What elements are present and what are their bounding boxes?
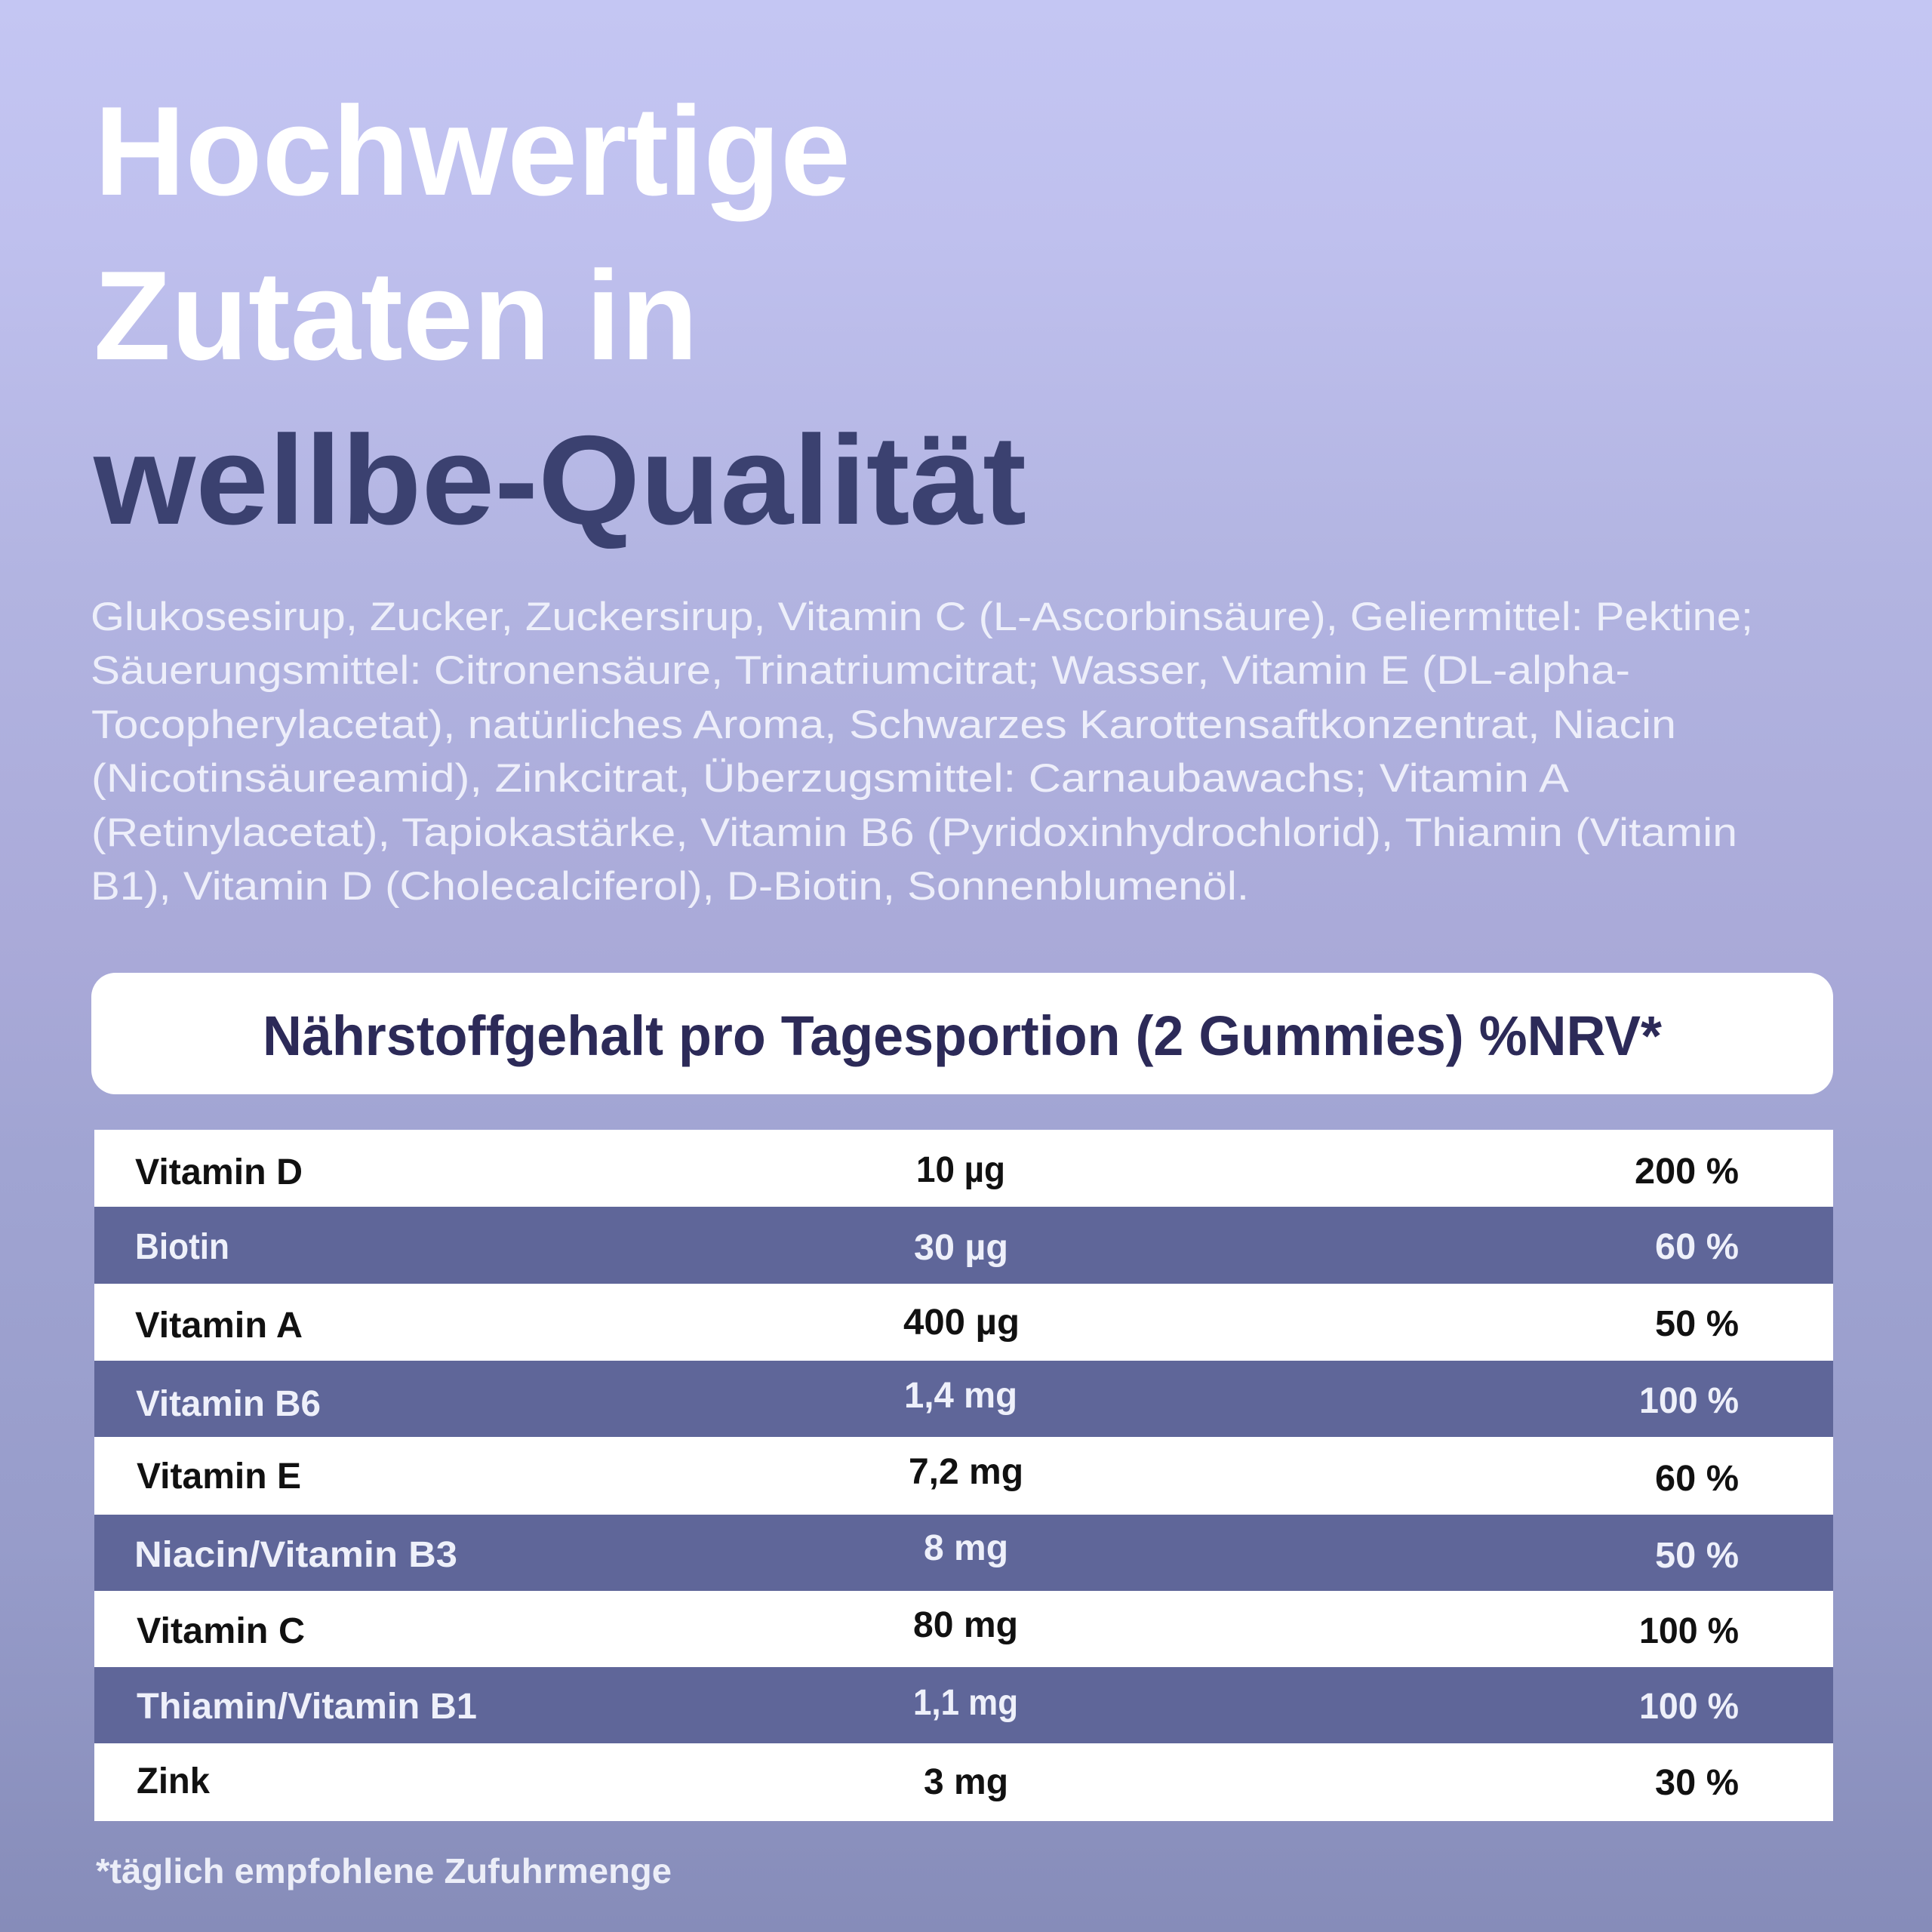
row: Niacin / Vitamin B3: 8 mg (924, 1528, 1008, 1568)
row: Zink: Zink (137, 1761, 210, 1801)
row: Vitamin D: 10 µg (916, 1150, 1005, 1190)
row: Vitamin D: Vitamin D (135, 1152, 303, 1192)
ingredients text block: Säuerungsmittel: Citronensäure, Trinatriumcitrat; Wasser, Vitamin E (DL-alpha- (91, 648, 1630, 693)
row: Vitamin D: 200 % (1635, 1152, 1739, 1192)
row: Vitamin C (94, 1591, 1833, 1667)
row: Vitamin C: 80 mg (913, 1605, 1018, 1645)
row: Vitamin A: 400 µg (903, 1303, 1020, 1343)
title (93, 80, 1026, 551)
ingredients text block: Tocopherylacetat), natürliches Aroma, Schwarzes Karottensaftkonzentrat, Niacin (91, 703, 1676, 747)
row: Vitamin E: 7,2 mg (909, 1452, 1023, 1492)
row: Niacin / Vitamin B3: Niacin/Vitamin B3 (134, 1535, 457, 1575)
row: Vitamin D (94, 1130, 1833, 1207)
row: Zink: 30 % (1655, 1763, 1739, 1803)
row: Vitamin B6: Vitamin B6 (136, 1384, 321, 1424)
row: Niacin / Vitamin B3: 50 % (1655, 1536, 1739, 1576)
row: Zink (94, 1743, 1833, 1821)
title: wellbe-Qualität (93, 409, 1026, 551)
nutrient table (94, 1130, 1833, 1821)
row: Thiamin / Vitamin B1 (94, 1667, 1833, 1743)
row: Thiamin / Vitamin B1: 100 % (1639, 1687, 1739, 1727)
row: Biotin: 30 µg (914, 1228, 1008, 1268)
ingredients text block: Glukosesirup, Zucker, Zuckersirup, Vitamin C (L-Ascorbinsäure), Geliermittel: Pektine; (91, 595, 1753, 639)
row: Vitamin A: Vitamin A (135, 1306, 303, 1346)
ingredients text block: B1), Vitamin D (Cholecalciferol), D-Biotin, Sonnenblumenöl. (91, 864, 1249, 909)
row: Biotin: Biotin (135, 1227, 229, 1267)
row: Vitamin E: Vitamin E (137, 1457, 301, 1497)
ingredients text block: (Retinylacetat), Tapiokastärke, Vitamin B6 (Pyridoxinhydrochlorid), Thiamin (Vitamin (91, 811, 1737, 855)
footnote: *täglich empfohlene Zufuhrmenge (96, 1851, 672, 1890)
nutrient table header card: Nährstoffgehalt pro Tagesportion (2 Gummies) %NRV* (263, 1004, 1662, 1067)
row: Vitamin B6: 1,4 mg (904, 1376, 1017, 1416)
row: Biotin (94, 1207, 1833, 1284)
nutrient table header card (91, 973, 1833, 1094)
row: Vitamin A: 50 % (1655, 1304, 1739, 1344)
row: Vitamin B6: 100 % (1639, 1381, 1739, 1421)
row: Thiamin / Vitamin B1: 1,1 mg (913, 1683, 1018, 1723)
row: Vitamin B6 (94, 1361, 1833, 1437)
row: Vitamin C: 100 % (1639, 1611, 1739, 1651)
row: Thiamin / Vitamin B1: Thiamin/Vitamin B1 (137, 1687, 477, 1727)
row: Biotin: 60 % (1655, 1227, 1739, 1267)
title: Hochwertige (94, 80, 851, 222)
row: Vitamin E: 60 % (1655, 1459, 1739, 1499)
row: Vitamin A (94, 1284, 1833, 1361)
row: Zink: 3 mg (924, 1762, 1008, 1802)
title: Zutaten in (94, 245, 698, 386)
row: Vitamin C: Vitamin C (137, 1611, 305, 1651)
row: Niacin / Vitamin B3 (94, 1515, 1833, 1591)
ingredients text block: (Nicotinsäureamid), Zinkcitrat, Überzugsmittel: Carnaubawachs; Vitamin A (91, 756, 1570, 801)
ingredients text block (91, 595, 1753, 909)
row: Vitamin E (94, 1437, 1833, 1515)
